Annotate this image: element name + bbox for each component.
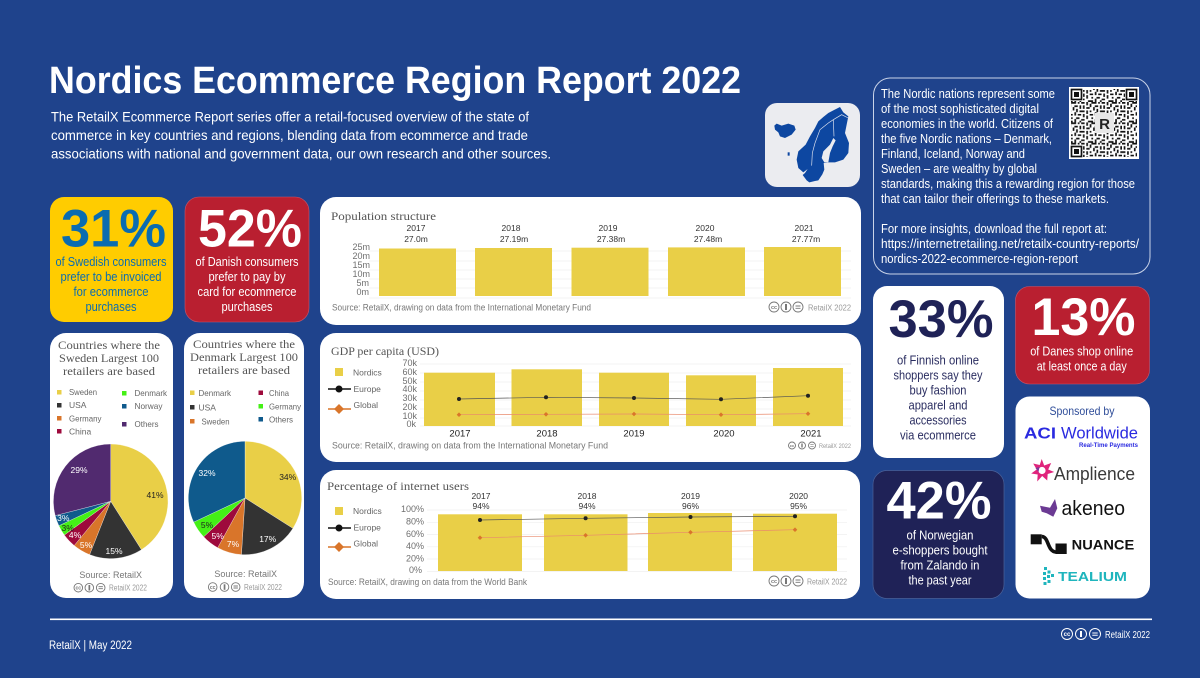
combo chart: internet users: 2018 [578,491,597,501]
footer licence [1062,628,1150,641]
about text: The Nordic nations represent some [881,87,1055,101]
combo chart: GDP [402,358,851,440]
stat: 33% Finnish shoppers [873,286,1004,458]
stat: 42% Norwegian e-shoppers: from Zalando in [900,558,980,572]
combo chart: internet users: 2020 [789,491,808,501]
bar chart: population: 10m [352,269,370,279]
combo chart: GDP: 20k [402,402,417,412]
pie labels: Denmark: 17% [259,534,277,544]
combo chart: GDP: 50k [402,376,417,386]
legend: internet users: Europe [354,522,381,532]
bar chart: population: 2020 [696,223,715,233]
logo: Tealium: TEALIUM [1058,570,1127,584]
source: Denmark pie: Source: RetailX [214,569,277,579]
bar chart: population: 0m [356,287,369,297]
combo chart: internet users: 0% [409,565,422,575]
pie chart: Denmark [188,441,302,555]
combo chart: GDP: 60k [402,367,417,377]
legend: Denmark pie: Germany [269,402,302,412]
pie labels: Denmark: 32% [198,468,216,478]
pie labels: Sweden: 15% [105,546,123,556]
intro text [51,108,551,162]
stat: 33% Finnish shoppers: buy fashion [910,382,966,398]
pie labels: Sweden: 4% [69,530,82,540]
about text: Finland, Iceland, Norway and [881,147,1025,161]
combo chart: GDP: 40k [402,384,417,394]
logo: Nuance [1031,534,1134,554]
combo chart: internet users: 60% [406,529,424,539]
bar chart: population: 25m [352,242,370,252]
source: GDP: Source: RetailX, drawing on data from the International Monetary Fund [332,440,608,450]
heading: Denmark retailers: Denmark Largest 100 [190,352,298,364]
source: internet users: Source: RetailX, drawing on data from the World Bank [328,577,527,587]
legend: Denmark pie: China [269,388,289,398]
panel: project intro [874,78,1150,274]
about text: https://internetretailing.net/retailx-country-reports/ [881,237,1139,251]
stat: 31% Swedish consumers: of Swedish consumers [56,254,167,269]
bar chart: population: 2018 [502,223,521,233]
about text: For more insights, download the full report at: [881,222,1107,236]
stat: 33% Finnish shoppers: 33% [888,290,994,349]
licence: population: cc [771,305,777,311]
about text [881,87,1139,266]
intro text: commerce in key countries and regions, blending data from ecommerce and trade [51,127,528,143]
pie labels: Sweden: 41% [146,490,164,500]
stat: 13% Danes shop daily: at least once a day [1037,358,1127,374]
pie labels: Denmark: 34% [279,472,297,482]
bar chart: population: 27.0m [404,234,428,244]
bar chart: population: 27.77m [792,234,820,244]
stat: 42% Norwegian e-shoppers: of Norwegian [906,528,974,542]
pie chart: Sweden [53,444,168,559]
pie labels: Sweden: 29% [70,465,88,475]
source: Sweden pie: Source: RetailX [79,570,142,580]
logo: ACI Worldwide [1024,424,1138,449]
stat: 13% Danes shop daily [1016,286,1150,384]
bar chart: population: 5m [356,278,369,288]
stat: 33% Finnish shoppers: via ecommerce [900,428,976,442]
title: Nordics Ecommerce Region Report 2022 [49,60,741,102]
combo chart: internet users: 80% [406,516,424,526]
stat: 52% Danish consumers: of Danish consumers [196,254,299,269]
stat: 33% Finnish shoppers: apparel and [908,398,968,412]
legend: Sweden pie: Denmark [134,388,168,398]
heading: internet users: Percentage of internet users [327,479,469,493]
licence: Sweden pie: cc [76,586,81,592]
legend: Sweden pie: China [69,426,91,436]
combo chart: internet users: 96% [682,501,699,511]
combo chart: GDP: 2021 [800,428,822,440]
pie labels: Denmark: 5% [212,531,224,541]
stat: 31% Swedish consumers: 31% [61,200,166,258]
stat: 31% Swedish consumers: for ecommerce [74,284,148,299]
heading: Sweden retailers: Countries where the [58,340,160,352]
bar chart: population: 2017 [407,223,426,233]
legend: Sweden pie: Sweden [69,387,97,397]
footer licence: cc [1064,632,1071,638]
stat: 13% Danes shop daily: 13% [1032,288,1136,347]
heading: GDP per capita: GDP per capita (USD) [331,344,439,358]
combo chart: GDP: 2020 [713,428,735,440]
stat: 42% Norwegian e-shoppers: 42% [886,472,992,530]
stat: 42% Norwegian e-shoppers: the past year [908,572,972,588]
legend: Sweden pie: Norway [134,401,163,411]
combo chart: internet users [401,491,847,575]
about text: that can tailor their offerings to these markets. [881,192,1109,206]
icon: QR code: R [1099,116,1110,133]
combo chart: internet users: 40% [406,541,424,551]
logo: ACI Worldwide: ACI [1024,426,1056,442]
panel: Percentage of internet users [320,470,860,599]
legend: Sweden pie: Others [134,419,158,429]
stat: 52% Danish consumers: 52% [198,200,302,258]
licence: population [769,302,852,312]
heading: Sweden retailers: Sweden Largest 100 [59,353,159,365]
icon: QR code [1069,87,1139,159]
bar chart: population: 27.38m [597,234,625,244]
legend: Denmark pie: Others [269,414,293,424]
combo chart: internet users: 2019 [681,491,700,501]
licence: Denmark pie: RetailX 2022 [244,583,282,592]
bar chart: population: 27.19m [500,234,528,244]
heading: Sweden retailers: retailers are based [63,366,155,378]
stat: 13% Danes shop daily: of Danes shop online [1030,344,1133,358]
combo chart: internet users: 20% [406,554,424,564]
legend: internet users [328,506,382,552]
panel: GDP per capita [320,333,861,462]
stat: 42% Norwegian e-shoppers: e-shoppers bought [892,542,988,558]
stat: 31% Swedish consumers [50,197,173,322]
combo chart: GDP: 0k [406,419,416,429]
pie labels: Sweden: 5% [80,540,93,550]
source: population: Source: RetailX, drawing on data from the International Monetary Fund [332,302,591,312]
licence: internet users: RetailX 2022 [807,578,847,586]
legend: Sweden pie: Germany [69,414,102,424]
sponsors heading: Sponsored by [1050,404,1114,418]
heading: Denmark retailers: Countries where the [193,339,295,351]
panel: sponsors [1016,396,1150,598]
legend: Denmark pie: Denmark [198,388,232,398]
licence: internet users: cc [771,579,777,585]
combo chart: internet users: 94% [578,501,596,511]
legend: GDP: Europe [354,384,381,394]
combo chart: internet users: 100% [401,504,424,514]
pie labels: Sweden: 3% [57,513,70,523]
pie labels: Denmark: 5% [201,520,214,530]
stat: 33% Finnish shoppers: shoppers say they [894,368,983,382]
combo chart: internet users: 2017 [472,491,491,501]
licence: GDP: RetailX 2022 [819,443,851,450]
logo: akeneo: akeneo [1062,498,1125,520]
stat: 31% Swedish consumers: purchases [86,299,137,314]
logo: Amplience: Amplience [1054,464,1135,484]
bar chart: population: 20m [352,251,370,261]
icon: Nordics map [765,103,860,187]
licence: Sweden pie: RetailX 2022 [109,584,147,592]
about text: of the most sophisticated digital [881,102,1039,116]
legend: GDP [328,368,382,414]
intro text: associations with national and government data, our own research and other sources. [51,146,551,162]
combo chart: GDP: 70k [402,358,417,368]
pie labels: Denmark: 7% [227,539,240,549]
stat: 33% Finnish shoppers: accessories [910,412,967,428]
footer licence: RetailX 2022 [1105,630,1150,641]
logo: Amplience [1031,459,1135,484]
stat: 52% Danish consumers: purchases [222,299,273,314]
legend: Denmark pie [190,388,302,426]
combo chart: GDP: 30k [402,393,417,403]
stat: 52% Danish consumers: prefer to pay by [208,269,286,284]
legend: Denmark pie: USA [198,402,216,412]
licence: internet users [769,576,847,586]
logo: Nuance: NUANCE [1072,536,1134,552]
legend: Sweden pie: USA [69,400,87,410]
combo chart: internet users: 94% [472,501,490,511]
combo chart: GDP: 2017 [449,428,471,440]
bar chart: population: 2021 [795,223,814,233]
bar chart: population: 15m [352,260,370,270]
licence: population: RetailX 2022 [808,304,852,312]
licence: GDP [788,442,851,450]
panel: Population structure [320,197,861,325]
licence: Sweden pie [74,583,147,592]
about text: standards, making this a rewarding region for those [881,177,1135,191]
logo: ACI Worldwide: Worldwide [1061,424,1138,442]
about text: economies in the world. Citizens of [881,117,1053,131]
logo: Tealium [1043,567,1127,585]
legend: GDP: Global [354,400,378,410]
combo chart: internet users: 95% [790,501,808,511]
stat: 42% Norwegian e-shoppers [873,470,1004,598]
pie labels: Sweden [57,465,164,556]
stat: 52% Danish consumers [185,197,309,322]
panel: Sweden pie chart [50,333,173,598]
about text: Sweden – are wealthy by global [881,162,1037,176]
stat: 31% Swedish consumers: prefer to be invoiced [60,269,162,284]
combo chart: GDP: 2018 [536,428,558,440]
licence: Denmark pie [208,583,282,592]
heading: Denmark retailers: retailers are based [198,365,290,377]
bar chart: population: 27.48m [694,234,722,244]
footer date: RetailX | May 2022 [49,640,132,652]
about text: the five Nordic nations – Denmark, [881,132,1052,146]
stat: 52% Danish consumers: card for ecommerce [198,284,296,299]
heading: Denmark retailers [190,339,298,377]
licence: GDP: cc [790,443,795,448]
combo chart: GDP: 2019 [623,428,645,440]
pie labels: Sweden: 3% [62,523,74,533]
heading: Population structure: Population structure [331,209,436,223]
legend: internet users: Nordics [353,506,382,516]
bar chart: population: 2019 [599,223,618,233]
legend: Denmark pie: Sweden [202,416,230,426]
pie labels: Denmark [198,468,297,549]
footer rule [50,618,1152,620]
about text: nordics-2022-ecommerce-region-report [881,252,1078,266]
licence: Denmark pie: cc [210,585,216,591]
heading: Sweden retailers [58,340,160,378]
combo chart: GDP: 10k [402,411,417,421]
intro text: The RetailX Ecommerce Report series offer a retail-focused overview of the state of [51,108,529,124]
legend: internet users: Global [354,538,378,548]
bar chart: population [352,223,851,298]
panel: Denmark pie chart [184,333,304,598]
legend: Sweden pie [57,387,168,436]
logo: ACI Worldwide: Real-Time Payments [1079,442,1138,449]
stat: 33% Finnish shoppers: of Finnish online [897,352,979,368]
legend: GDP: Nordics [353,368,382,378]
